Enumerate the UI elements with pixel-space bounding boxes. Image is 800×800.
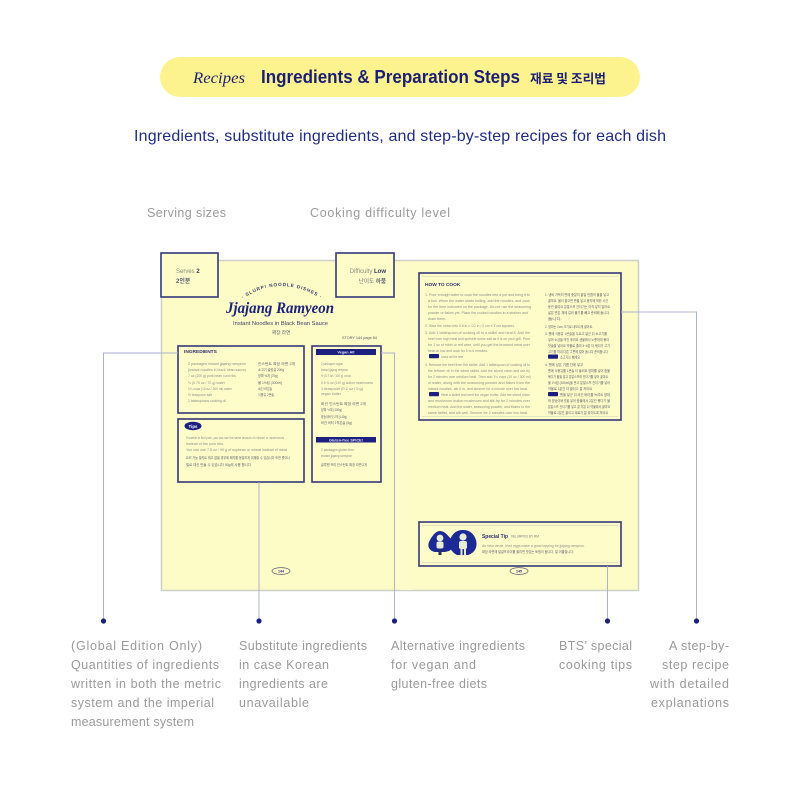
callout: substitute ingredients: in case Korean bbox=[239, 658, 329, 672]
panel: ingredients: 1¼ cups (10 oz / 300 ml) water bbox=[188, 387, 233, 391]
panel: vegan and gluten-free alternatives: 비건 인스턴트 짜장 라면 2개 bbox=[321, 401, 366, 406]
panel: how to cook: 1. Pour enough water to cook the noodles into a pot and bring it to bbox=[425, 293, 530, 297]
subtitle: Ingredients, substitute ingredients, and step-by-step recipes for each dish bbox=[134, 128, 666, 145]
panel: how to cook: 1. 냄비 가득히 면에 충분히 끓일 만큼의 물을 넣고 bbox=[545, 292, 610, 297]
panel: vegan and gluten-free alternatives: vegan butter bbox=[321, 392, 342, 396]
callout: substitute ingredients: ingredients are bbox=[239, 677, 328, 691]
callout: substitute ingredients: Substitute ingredients bbox=[239, 639, 367, 653]
recipe heading: 짜장 라면 bbox=[272, 329, 290, 336]
callout: alternative ingredients: gluten-free diets bbox=[391, 677, 487, 691]
leader line: step-by-step recipe bbox=[621, 312, 699, 624]
panel: vegan and gluten-free alternatives: 0.5 ¾ oz (140 g) button mushrooms bbox=[321, 381, 373, 385]
title pill bbox=[160, 57, 640, 97]
panel: ingredients: 소고기 설렁살 200g bbox=[258, 367, 284, 372]
panel: how to cook: 소고기는 빼세요 bbox=[560, 354, 581, 360]
panel: servings: 2인분 bbox=[176, 277, 191, 285]
panel: how to cook: 3. 팬에 식용유 1큰술을 두르고 달군 뒤 소고기를 bbox=[545, 331, 608, 336]
panel: ingredients: (instant noodles in black bean sauce) bbox=[188, 368, 246, 372]
panel: how to cook: 넣어 소금을 약간 뿌려요 센불에서 노릇하게 볶아 bbox=[548, 337, 610, 342]
callout: step-by-step recipe: explanations bbox=[651, 696, 729, 710]
recipe heading: · SLURP! NOODLE DISHES · bbox=[242, 282, 321, 298]
panel: how to cook: 3. Add 1 tablespoon of cooking oil to a skillet and heat it. Add the bbox=[425, 331, 530, 335]
panel: how to cook: heat on low and cook for 5 to 6 minutes. bbox=[428, 349, 488, 353]
callout: special cooking tips bbox=[559, 639, 632, 672]
panel: vegan and gluten-free alternatives: 양파 ½개 (100g) bbox=[321, 407, 342, 412]
panel: difficulty bbox=[336, 253, 394, 297]
callout: step-by-step recipe bbox=[649, 639, 729, 710]
panel: how to cook: 분말스프 건더기를 넣고 잘 저은 뒤 약불에서 끓여요 bbox=[548, 404, 611, 409]
panel: ingredients: INGREDIENTS bbox=[184, 349, 218, 355]
panel: ingredients: 소금 ½작은술 bbox=[258, 386, 272, 391]
title pill: Recipes bbox=[192, 70, 245, 87]
callout: step-by-step recipe: step recipe bbox=[662, 658, 729, 672]
panel: ingredients: 식용유 2큰술 bbox=[258, 392, 275, 397]
panel: ingredients: 2 tablespoons cooking oil bbox=[188, 399, 226, 403]
panel: how to cook: of water, along with the seasoning powder and flakes from the bbox=[428, 381, 530, 385]
callout: global edition quantities bbox=[70, 639, 221, 729]
panel: tips: You can use 7.5 oz / 90 g of soybean or wheat instead of meat. bbox=[186, 448, 288, 452]
panel: how to cook: 와 양송이버섯을 넣어 중불에서 2분간 볶다가 물 bbox=[548, 398, 611, 403]
panel: ingredients: ½ teaspoon salt bbox=[188, 393, 212, 397]
callout: step-by-step recipe: with detailed bbox=[649, 677, 729, 691]
panel: how to cook: 팬에 식용유를 1큰술 더 둘러요 양파를 넣어 중불 bbox=[548, 368, 611, 373]
callout: alternative ingredients bbox=[391, 639, 525, 691]
panel: tips: Tips bbox=[189, 424, 198, 429]
page number: right bbox=[510, 568, 528, 574]
callout: alternative ingredients: for vegan and bbox=[391, 658, 476, 672]
leader line: substitute ingredients bbox=[256, 482, 262, 624]
panel: vegan and gluten-free alternatives: 비건 버터 1작은술 (5g) bbox=[321, 420, 352, 425]
panel: vegan and gluten-free alternatives: 1 teaspoon (0.2 oz / 5 g) bbox=[321, 387, 363, 391]
panel: how to cook: 2. 양파는 2cm 크기로 네모나게 썰어요. bbox=[545, 324, 593, 329]
panel: how to cook: 2. Slice the onion into 0.8 in x 1/2 in / 2 cm x 1 cm squares. bbox=[425, 324, 515, 328]
book spread bbox=[160, 252, 640, 592]
icon: BTS member illustration right bbox=[449, 530, 477, 556]
panel: vegan and gluten-free alternatives bbox=[312, 346, 381, 482]
panel: special tip: As rotor wrote, fried eggs make a good topping for jjajang ramyeon. bbox=[482, 544, 585, 548]
panel: how to cook: for the time indicated on the package. Do not use the seasoning bbox=[428, 305, 531, 309]
panel: ingredients bbox=[178, 346, 304, 413]
panel: how to cook: 4. Remove the beef from the skillet. Add 1 tablespoon of cooking oil to bbox=[425, 363, 530, 367]
panel: how to cook: 팬을 달군 뒤 비건 버터를 녹여요 양파 bbox=[560, 392, 611, 397]
panel: how to cook: 삶은 면은 체에 걸러 물기를 빼고 준비해 둡니다. bbox=[548, 310, 610, 315]
panel: vegan and gluten-free alternatives: 2 packages gluten-free bbox=[321, 448, 354, 452]
leader line: ingredient quantities bbox=[101, 353, 178, 624]
panel: difficulty: 난이도 하품 bbox=[359, 277, 386, 285]
panel: how to cook: beef over high heat and sprinkle some salt as it is on your grill. Pour bbox=[428, 337, 531, 341]
icon: BTS member illustration left bbox=[428, 531, 453, 555]
panel: ingredients: ¾ (0.75 oz / 70 g) water bbox=[188, 381, 226, 385]
panel: ingredients: 양파 ½개 (70g) bbox=[258, 373, 278, 378]
panel: difficulty: Difficulty Low bbox=[350, 269, 386, 275]
panel: how to cook: 물 1½컵 (300ml)을 붓고 분말스프 건더기를 넣어 bbox=[548, 380, 610, 385]
callout: alternative ingredients: Alternative ingredients bbox=[391, 639, 525, 653]
page number: left bbox=[272, 568, 290, 574]
panel: how to cook: HOW TO COOK bbox=[425, 282, 461, 288]
panel: ingredients: 2 packages instant jjajang ramyeon bbox=[188, 362, 246, 366]
callout: global edition quantities: (Global Edition Only) bbox=[71, 639, 202, 653]
callout: substitute ingredients: unavailable bbox=[239, 696, 309, 710]
callout: special cooking tips: cooking tips bbox=[559, 658, 632, 672]
panel: how to cook: 고기를 꺼내 다른 그릇에 덜어 둡니다 준비합니다 bbox=[548, 349, 609, 354]
panel: tips: 요리 가능 밀키트 재고 없을 경우에 돼지를 동일하게 대체할 수 있습니다 또한 콩이나 bbox=[186, 455, 291, 460]
leader line: alternative ingredients bbox=[381, 353, 397, 624]
recipe heading: Jjajang Ramyeon bbox=[225, 300, 334, 317]
panel: how to cook: 4. 팬에 남은 기름 잔에 넣고 bbox=[545, 362, 584, 367]
panel: how to cook: 약불로 2분간 끓이고 재료가 잘 섞이도록 저어요 bbox=[548, 410, 609, 415]
panel: how to cook: 끓여요. 물이 끓으면 면을 넣고 봉지에 적힌 시간 bbox=[548, 298, 609, 303]
panel: how to cook: for 2 minutes over medium heat. Then add 1¼ cups (10 oz / 300 ml) bbox=[428, 375, 531, 379]
panel: tips: 밀로 대신 만들 수 있습니다 90g의 사용 합니다 bbox=[186, 462, 252, 467]
panel: special tip: 짜장 라면에 달걀프라이를 올리면 맛있는 토핑이 됩니다. 잘 어울립니다. bbox=[482, 549, 574, 554]
callout: substitute ingredients bbox=[239, 639, 367, 710]
leader line: special tips bbox=[605, 566, 610, 624]
callout: global edition quantities: system and the imperial bbox=[71, 696, 214, 710]
panel: vegan and gluten-free alternatives: 양송이버섯 2개 (140g) bbox=[321, 414, 347, 419]
panel: how to cook: 둡니다. bbox=[548, 316, 562, 321]
panel: how to cook: medium heat. Add the water, seasoning powder, and flakes to the bbox=[428, 405, 530, 409]
panel: special tip bbox=[419, 522, 621, 566]
panel: special tip: #SLURPED BY RM bbox=[511, 534, 539, 538]
panel: special tip: Special Tip bbox=[482, 534, 508, 540]
panel: tips: instead of the pork ribs. bbox=[186, 442, 224, 446]
panel: how to cook: Leave out the beef. bbox=[441, 355, 464, 359]
panel: vegan and gluten-free alternatives: Gluten-free SPICE! bbox=[329, 438, 363, 442]
panel: how to cook bbox=[419, 273, 621, 420]
panel: how to cook: drain them. bbox=[428, 317, 446, 321]
panel: vegan and gluten-free alternatives: 2 packages vegan bbox=[321, 362, 343, 366]
panel: servings: Serves 2 bbox=[176, 269, 200, 275]
panel: ingredients: 7 oz (200 g) pork bean curd ribs bbox=[188, 374, 236, 378]
panel: how to cook: and mushroom button mushroom and stir-fry for 2 minutes over bbox=[428, 399, 531, 403]
panel: vegan and gluten-free alternatives: instant jjajang ramyeon bbox=[321, 368, 348, 372]
panel: how to cook: 맛술을 넣어요 약불로 줄여 5~6분 더 볶다가 고기 bbox=[548, 343, 610, 348]
callout: global edition quantities: Quantities of ingredients bbox=[71, 658, 219, 672]
label: cooking difficulty level: Cooking difficulty level bbox=[310, 206, 450, 220]
panel: how to cook: 볶다가 물을 넣고 분말스프와 건더기를 넣어 끓여요 bbox=[548, 374, 609, 379]
page number: left: 144 bbox=[278, 569, 284, 573]
callout: global edition quantities: written in both the metric bbox=[70, 677, 221, 691]
panel: servings bbox=[161, 253, 218, 297]
callout: global edition quantities: measurement system bbox=[71, 715, 194, 729]
panel: how to cook: 동안 끓여요 분말스프 건더기는 아직 넣지 말아요 bbox=[548, 304, 611, 309]
panel: ingredients: 인스턴트 짜장 라면 2개 bbox=[258, 361, 295, 366]
recipe heading: Instant Noodles in Black Bean Sauce bbox=[233, 321, 328, 327]
panel: how to cook: 약불로 1분간 더 끓이고 잘 저어요 bbox=[548, 386, 593, 391]
panel: vegan and gluten-free alternatives: ½ (0.7 oz / 100 g) onion bbox=[321, 374, 351, 378]
title pill: 재료 및 조리법 bbox=[530, 68, 606, 87]
recipe heading bbox=[225, 282, 377, 340]
panel: how to cook: for 1 oz of mirin or red wine, until you get the browned meat over bbox=[428, 343, 531, 347]
panel: how to cook: instant noodles, stir it in, and simmer for a minute over low heat. bbox=[428, 387, 528, 391]
label: serving sizes: Serving sizes bbox=[147, 206, 226, 220]
panel: how to cook: powder or flakes yet. Place the cooked noodles in a strainer and bbox=[428, 311, 528, 315]
panel: how to cook: same skillet, and stir well. Simmer for 2 minutes over low heat. bbox=[428, 411, 528, 415]
title pill: Ingredients & Preparation Steps bbox=[261, 66, 520, 87]
panel: how to cook: the leftover oil in the same skillet. Add the sliced onion and stir-fry bbox=[428, 369, 530, 373]
panel: vegan and gluten-free alternatives: Vegan Alt bbox=[337, 350, 355, 354]
panel: tips bbox=[178, 419, 304, 482]
callout: step-by-step recipe: A step-by- bbox=[669, 639, 729, 653]
recipe heading: STORY 144 page 84 bbox=[342, 336, 377, 340]
panel: how to cook: Heat a skillet and melt the vegan butter. Add the sliced onion bbox=[441, 393, 530, 397]
panel: vegan and gluten-free alternatives: 글루텐 프리 인스턴트 짜장 라면 2개 bbox=[321, 462, 367, 467]
page number: right: 145 bbox=[516, 569, 522, 573]
callout: special cooking tips: BTS’ special bbox=[559, 639, 632, 653]
panel: vegan and gluten-free alternatives: instant jjajang ramyeon bbox=[321, 454, 352, 458]
panel: how to cook: a boil. When the water starts boiling, add the noodles, and cook bbox=[428, 299, 530, 303]
panel: tips: If unable to find pork, you can use the same amount of chicken or mushrooms bbox=[186, 436, 284, 440]
panel: ingredients: 물 1½컵 (300ml) bbox=[258, 380, 282, 385]
